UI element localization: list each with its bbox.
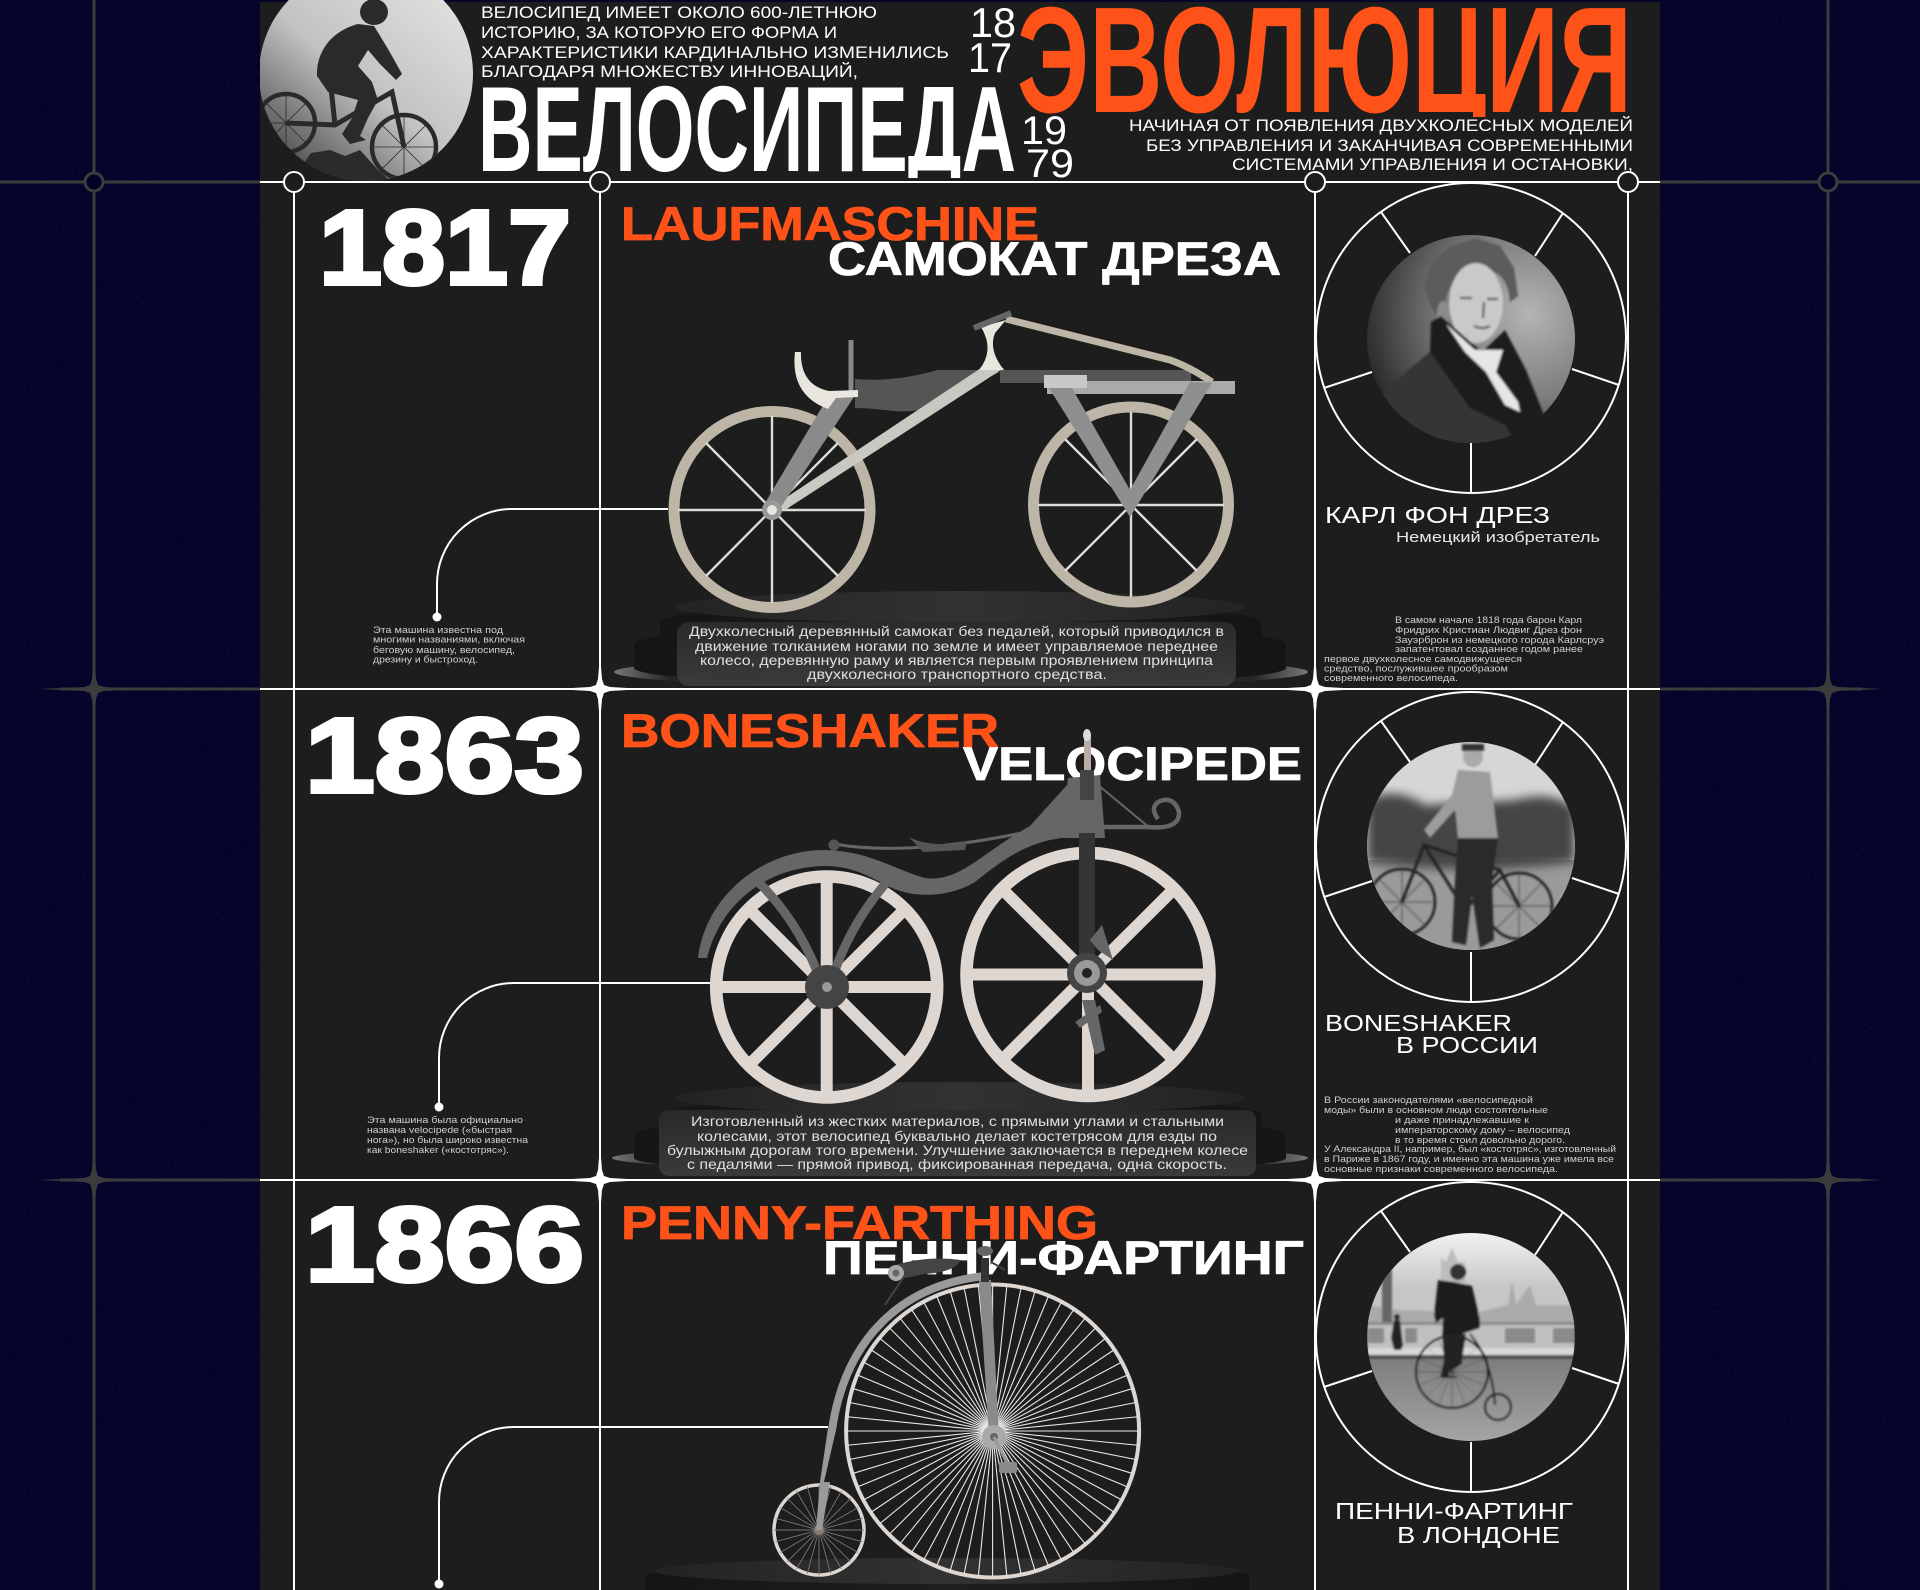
panel: 1817 (319, 183, 1626, 688)
caption (1335, 1498, 1574, 1548)
person text: основные признаки современного велосипеда. (1324, 1164, 1558, 1175)
years 1817: 18 (970, 0, 1016, 46)
years 1979 (1021, 109, 1074, 186)
panel: 1863 (305, 692, 1626, 1176)
main dark panel (260, 2, 1660, 1590)
year 1817: 1817 (319, 189, 571, 307)
note (367, 1115, 529, 1156)
person text: В России законодателями «велосипедной (1324, 1095, 1533, 1106)
title: велосипеда: ВЕЛОСИПЕДА (478, 61, 1016, 197)
years 1979: 79 (1026, 142, 1074, 186)
caption: В РОССИИ (1396, 1032, 1538, 1058)
connector (439, 1427, 828, 1584)
note (373, 625, 525, 666)
grid lines (260, 172, 1660, 1590)
note: беговую машину, велосипед, (373, 645, 515, 656)
bicycle: draisine (674, 313, 1235, 608)
intro text: ИСТОРИЮ, ЗА КОТОРУЮ ЕГО ФОРМА И (481, 23, 837, 42)
connector dot (434, 1580, 444, 1588)
person name (1325, 502, 1600, 546)
note: Эта машина была официально (367, 1115, 523, 1126)
photo: man with bicycle (1367, 742, 1575, 950)
description box: булыжным дорогам того времени. Улучшение заключается в переднем колесе (667, 1142, 1248, 1158)
description box: колесо, деревянную раму и является первым проявлением принципа (700, 652, 1213, 668)
description box (659, 1110, 1256, 1176)
podium (645, 1558, 1249, 1590)
person text: У Александра II, например, был «костотряс», изготовленный (1324, 1144, 1616, 1155)
name: penny-farthing: PENNY-FARTHING (621, 1196, 1098, 1249)
years 1979: 19 (1021, 109, 1067, 153)
bicycle: penny-farthing (774, 1246, 1139, 1578)
intro text (481, 3, 949, 81)
panel: 1866 (305, 1182, 1626, 1590)
right text: СИСТЕМАМИ УПРАВЛЕНИЯ И ОСТАНОВКИ, (1232, 155, 1633, 174)
person text: в Париже в 1867 году, и именно эта машина уже имела все (1324, 1154, 1614, 1165)
person text: и даже принадлежавшие к (1395, 1115, 1530, 1126)
person text: средство, послужившее прообразом (1324, 664, 1508, 674)
intro text: ВЕЛОСИПЕД ИМЕЕТ ОКОЛО 600-ЛЕТНЮЮ (481, 3, 877, 22)
intro text: ХАРАКТЕРИСТИКИ КАРДИНАЛЬНО ИЗМЕНИЛИСЬ (481, 43, 949, 62)
ring diagram (1316, 692, 1626, 1002)
note: многими названиями, включая (373, 634, 525, 646)
photo: cyclist silhouette (257, 0, 480, 182)
person text: современного велосипеда. (1324, 673, 1458, 684)
years 1817: 17 (968, 34, 1012, 81)
name: laufmaschine: LAUFMASCHINE (621, 197, 1039, 250)
year 1866: 1866 (305, 1186, 584, 1304)
person text: императорскому дому – велосипед (1395, 1125, 1571, 1136)
person name: КАРЛ ФОН ДРЕЗ (1325, 502, 1550, 528)
intro text: БЛАГОДАРЯ МНОЖЕСТВУ ИННОВАЦИЙ, (481, 62, 858, 81)
connector (439, 983, 710, 1107)
name: velocipede: VELOCIPEDE (963, 737, 1302, 790)
year 1863: 1863 (305, 697, 584, 815)
photo: rider in London (1367, 1233, 1575, 1445)
bicycle: boneshaker (698, 729, 1210, 1098)
ring diagram (1316, 183, 1626, 493)
caption (1325, 1010, 1538, 1058)
person text: в то время стоил довольно дорого. (1395, 1135, 1565, 1146)
description box: Изготовленный из жестких материалов, с прямыми углами и стальными (691, 1113, 1224, 1129)
person text: Зауэрброн из немецкого города Карлсруэ (1395, 635, 1604, 646)
portrait: Karl von Drais (1367, 235, 1575, 450)
years 1817 (968, 0, 1016, 81)
person text: первое двухколесное самодвижущееся (1324, 654, 1522, 665)
person text: Фридрих Кристиан Людвиг Дрез фон (1395, 625, 1582, 636)
note: названа velocipede («быстрая (367, 1125, 512, 1136)
person text (1324, 615, 1604, 684)
caption: ПЕННИ-ФАРТИНГ (1335, 1498, 1574, 1524)
header (257, 0, 1633, 197)
description box: двухколесного транспортного средства. (807, 666, 1107, 682)
description box: колесами, этот велосипед буквально делает костетрясом для езды по (697, 1128, 1217, 1144)
podium (614, 591, 1308, 688)
name: пенни-фартинг: ПЕННИ-ФАРТИНГ (823, 1231, 1304, 1284)
right text: БЕЗ УПРАВЛЕНИЯ И ЗАКАНЧИВАЯ СОВРЕМЕННЫМИ (1146, 136, 1633, 155)
caption: BONESHAKER (1325, 1010, 1512, 1036)
person name: Немецкий изобретатель (1396, 529, 1600, 546)
description box: Двухколесный деревянный самокат без педалей, который приводился в (689, 623, 1224, 639)
note: дрезину и быстроход. (373, 654, 478, 666)
person text (1324, 1095, 1616, 1175)
description box (677, 622, 1236, 686)
podium (612, 1082, 1308, 1174)
name: boneshaker: BONESHAKER (621, 704, 999, 757)
note: Эта машина известна под (373, 625, 504, 636)
person text: моды» были в основном люди состоятельные (1324, 1105, 1548, 1116)
name: самокат дреза: САМОКАТ ДРЕЗА (828, 232, 1281, 285)
right text: НАЧИНАЯ ОТ ПОЯВЛЕНИЯ ДВУХКОЛЕСНЫХ МОДЕЛЕЙ (1129, 116, 1633, 135)
person text: В самом начале 1818 года барон Карл (1395, 615, 1582, 626)
description box: движение толканием ногами по земле и имеет управляемое переднее (695, 638, 1218, 654)
note: нога»), но была широко известна (367, 1135, 529, 1146)
connector (437, 509, 668, 617)
person text: запатентовал созданное годом ранее (1395, 644, 1583, 655)
caption: В ЛОНДОНЕ (1397, 1522, 1560, 1548)
ring diagram (1316, 1182, 1626, 1492)
connector dot (432, 612, 442, 622)
right text (1129, 116, 1633, 174)
connector dot (434, 1102, 444, 1112)
description box: с педалями — прямой привод, фиксированная передача, одна скорость. (687, 1156, 1227, 1172)
note: как boneshaker («костотряс»). (367, 1145, 509, 1156)
